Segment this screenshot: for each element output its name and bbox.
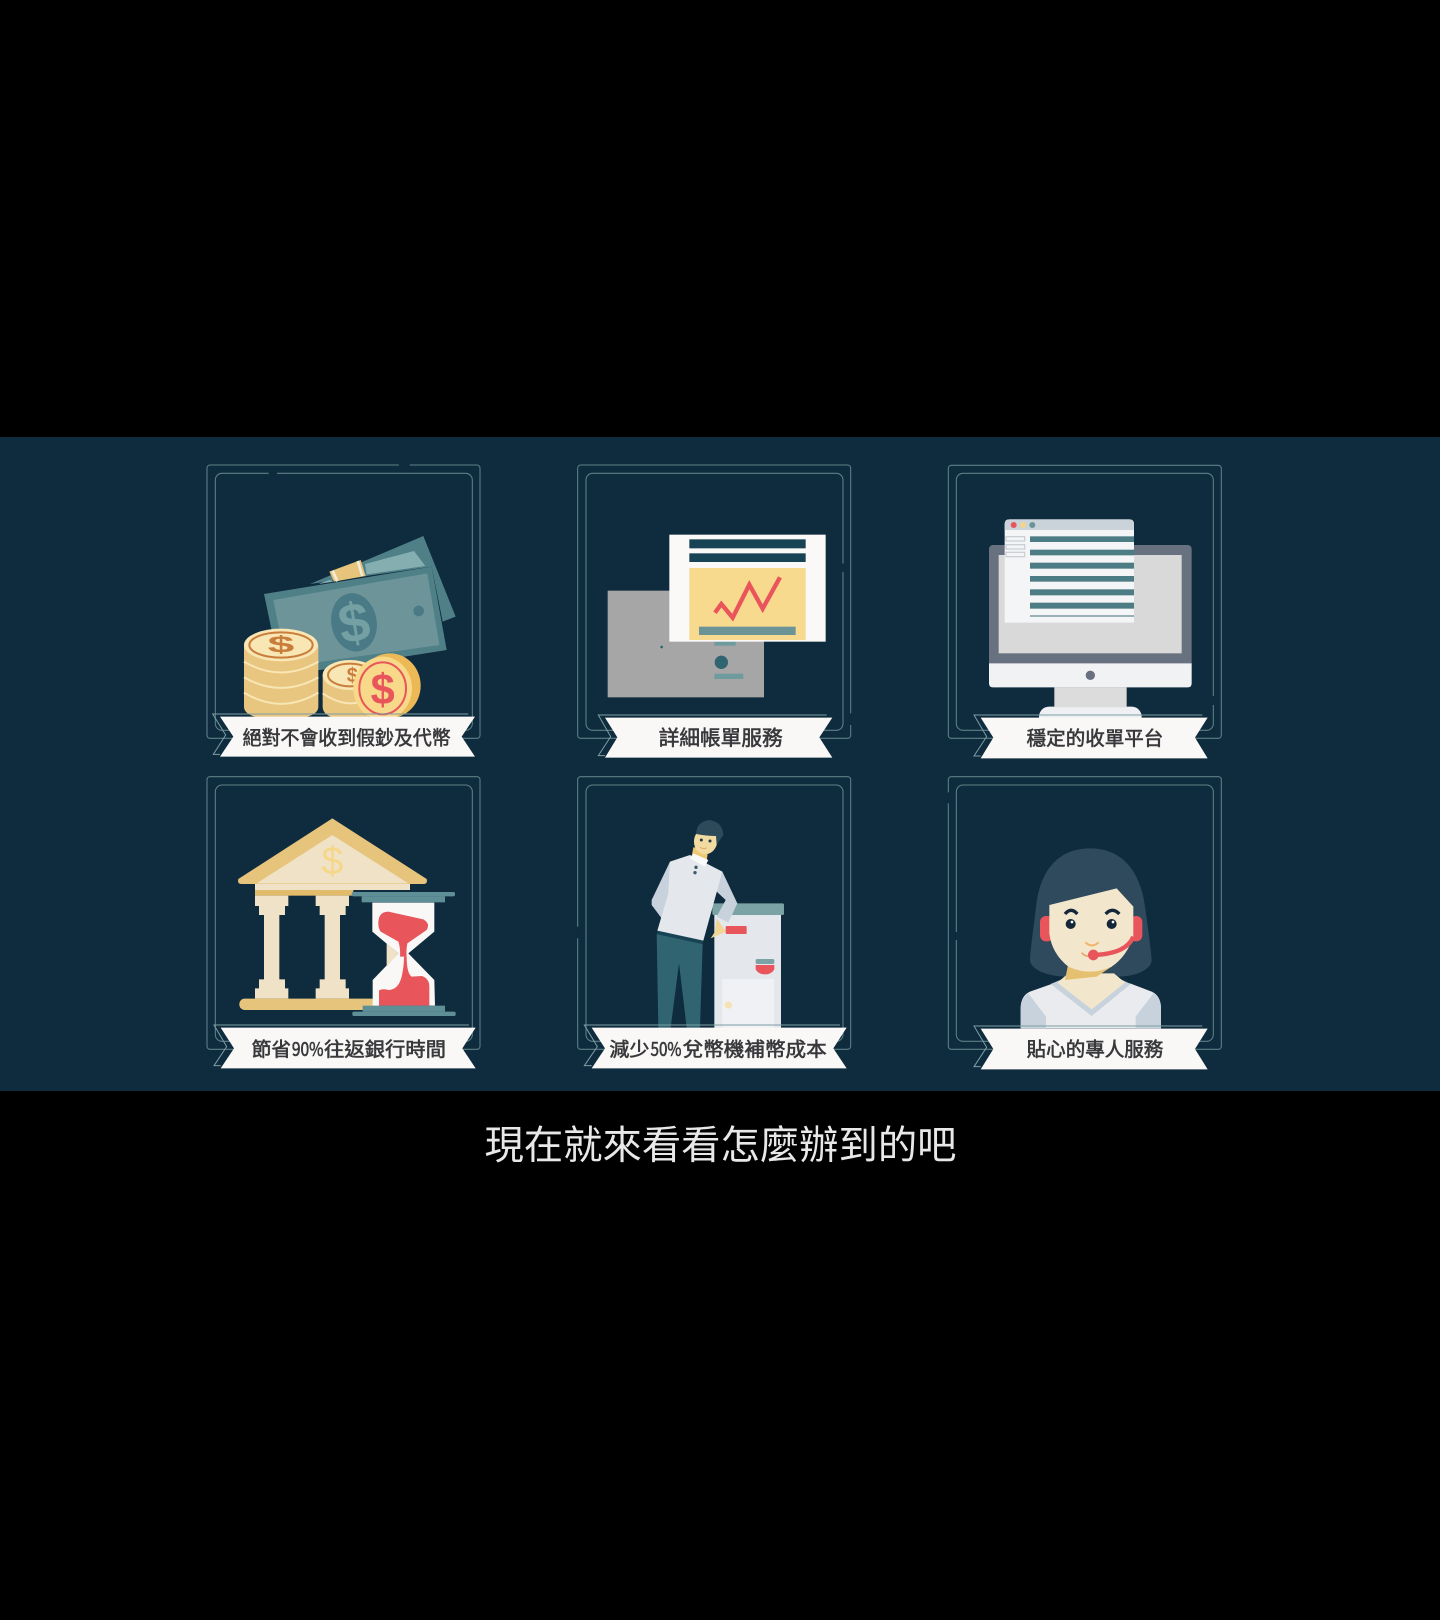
ribbon label: [213, 714, 475, 757]
subtitle caption: 現在就來看看怎麼辦到的吧: [484, 1124, 956, 1168]
ribbon label: 90%: [292, 1034, 324, 1062]
icon: coin stack small: $: [347, 665, 358, 687]
ribbon label: [598, 715, 832, 758]
ribbon label: 穩定的收單平台: [1027, 723, 1163, 751]
icon: coin stack large: $: [268, 632, 294, 658]
icon: grey card: [608, 591, 764, 697]
icon: coin stack large: [244, 629, 318, 719]
panel: detailed statements: [578, 465, 851, 758]
icon: browser window: [1005, 519, 1134, 623]
ribbon label: 兌幣機補幣成本: [683, 1034, 827, 1062]
panel: stable acquiring platform: [948, 465, 1221, 758]
panel: save bank trips: [207, 777, 480, 1068]
card frame: [948, 777, 1221, 1049]
icon: report with chart: [669, 535, 826, 642]
ribbon label: [974, 1026, 1208, 1069]
ribbon label: 貼心的專人服務: [1027, 1034, 1163, 1062]
ribbon label: 詳細帳單服務: [659, 721, 783, 751]
icon: front coin: [353, 653, 421, 720]
background band: [0, 437, 1440, 1091]
card frame: [207, 777, 480, 1049]
icon: coin stack small: [323, 660, 377, 719]
ribbon label: 減少: [609, 1034, 649, 1062]
icon: banknotes: $: [334, 589, 375, 656]
panel: dedicated service: [948, 777, 1221, 1069]
ribbon label: 50%: [650, 1034, 682, 1062]
card frame: [578, 465, 851, 738]
card frame: [207, 465, 480, 738]
icon: man: [652, 820, 737, 1028]
ribbon label: 往返銀行時間: [324, 1034, 446, 1062]
icon: bank: $: [321, 839, 343, 883]
panel: reduce refill cost: [578, 777, 851, 1068]
ribbon label: [584, 1025, 847, 1068]
ribbon label: [214, 1025, 476, 1068]
ribbon label: 節省: [252, 1034, 291, 1062]
ribbon label: [974, 715, 1208, 758]
icon: banknotes: [264, 536, 456, 670]
ribbon label: 絕對不會收到假鈔及代幣: [243, 722, 451, 750]
icon: machine: [712, 903, 784, 1028]
icon: bank: [238, 818, 427, 1010]
icon: monitor: [989, 545, 1192, 727]
card frame: [578, 777, 851, 1049]
icon: agent: [1021, 848, 1161, 1028]
panel: no counterfeit notes: [207, 465, 480, 757]
icon: front coin: $: [371, 666, 395, 714]
card frame: [948, 465, 1221, 738]
icon: hourglass: [352, 892, 456, 1016]
